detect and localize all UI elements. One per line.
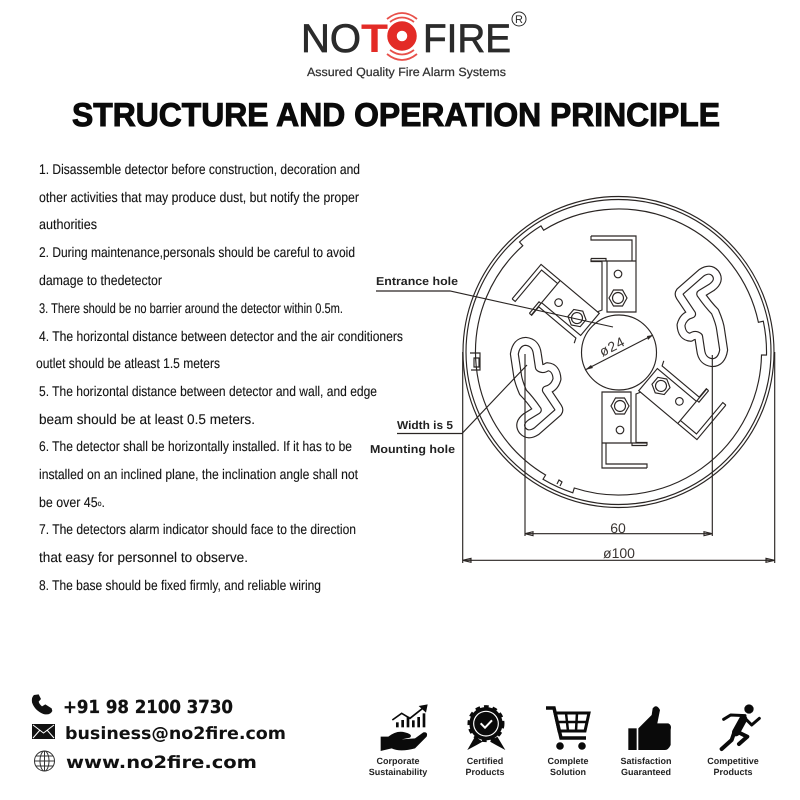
feature: competitive products [707, 704, 759, 777]
title: STRUCTURE AND OPERATION PRINCIPLE [72, 96, 720, 133]
instructions text block: authorities [39, 216, 97, 232]
website address: www.no2fire.com [66, 753, 257, 773]
instructions text block: be over 45 [39, 494, 105, 510]
dimension: 60: 60 [610, 520, 626, 536]
label: entrance hole: Entrance hole [376, 276, 458, 288]
inner ring with notches [475, 209, 767, 495]
label: Competitive [707, 756, 759, 766]
instructions text block: damage to thedetector [39, 272, 162, 288]
instructions text block: 8. The base should be fixed firmly, and reliable wiring [39, 577, 321, 593]
label: entrance hole [376, 276, 613, 327]
side clip [470, 353, 480, 370]
label: width and mounting hole [370, 365, 527, 456]
registered mark: R [515, 14, 523, 26]
instructions text block: 5. The horizontal distance between detector and wall, and edge [39, 383, 377, 399]
registered mark [512, 12, 526, 26]
center hole [582, 315, 656, 390]
icon: shopping cart [546, 708, 589, 750]
label: Sustainability [369, 767, 427, 777]
logo wordmark: red T: T [361, 17, 388, 61]
dimension: 24 diameter [585, 333, 653, 370]
icon: phone [32, 694, 52, 714]
logo wordmark: FIRE: FIRE [423, 17, 511, 61]
dimension: 24 diameter: ø24 [597, 333, 627, 360]
label: width and mounting hole: Width is 5 [397, 420, 454, 432]
label: Products [713, 767, 753, 777]
instructions text block: 3. There should be no barrier around the detector within 0.5m. [39, 300, 343, 316]
logo tagline: Assured Quality Fire Alarm Systems [307, 65, 506, 79]
instructions text block: 4. The horizontal distance between detector and the air conditioners [39, 328, 403, 344]
feature: certified products [465, 707, 505, 777]
contact block [32, 694, 286, 773]
phone number: +91 98 2100 3730 [63, 697, 233, 718]
icon: hand with growth chart [381, 704, 428, 751]
feature: complete solution [546, 708, 589, 777]
label: Solution [550, 767, 586, 777]
instructions text block: 2. During maintenance,personals should be careful to avoid [39, 244, 355, 260]
label: Guaranteed [621, 767, 671, 777]
instructions text block: o [98, 499, 102, 508]
label: width and mounting hole: Mounting hole [370, 444, 455, 456]
instructions text block: beam should be at least 0.5 meters. [39, 411, 255, 427]
ring tab [557, 480, 562, 486]
email address: business@no2fire.com [65, 724, 286, 744]
detector base technical drawing [463, 196, 775, 563]
terminal: top [591, 236, 636, 312]
icon: thumbs up [628, 706, 671, 750]
label: Certified [467, 756, 503, 766]
icon: envelope [32, 724, 55, 739]
label: Products [465, 767, 505, 777]
dimension: 100 diameter [463, 352, 775, 563]
mounting hole: left [514, 341, 559, 434]
logo wordmark: NO: NO [301, 17, 361, 61]
label: Complete [547, 756, 589, 766]
instructions text block [36, 161, 403, 593]
dimension: 60 [525, 354, 712, 536]
icon: running figure [722, 704, 759, 749]
icon: globe [34, 751, 54, 771]
icon: award badge [467, 707, 505, 750]
terminal: bottom [602, 392, 647, 468]
dimension: 100 diameter: ø100 [603, 545, 635, 561]
instructions text block: . [102, 494, 105, 510]
label: Corporate [376, 756, 420, 766]
label: Satisfaction [620, 756, 672, 766]
feature: corporate sustainability [369, 704, 428, 777]
logo target O [387, 13, 417, 60]
outer rings [463, 196, 774, 508]
logo [301, 12, 526, 79]
instructions text block: 6. The detector shall be horizontally installed. If it has to be [39, 438, 352, 454]
instructions text block: installed on an inclined plane, the inclination angle shall not [39, 466, 358, 482]
terminal: upper left [512, 264, 599, 348]
mounting hole: right [679, 270, 724, 363]
instructions text block: 1. Disassemble detector before construction, decoration and [39, 161, 360, 177]
instructions text block: outlet should be atleast 1.5 meters [36, 355, 220, 371]
instructions text block: other activities that may produce dust, but notify the proper [39, 189, 359, 205]
instructions text block: that easy for personnel to observe. [39, 549, 248, 565]
terminal: lower right [639, 356, 726, 440]
feature: satisfaction guaranteed [620, 706, 672, 777]
instructions text block: 7. The detectors alarm indicator should face to the direction [39, 521, 356, 537]
